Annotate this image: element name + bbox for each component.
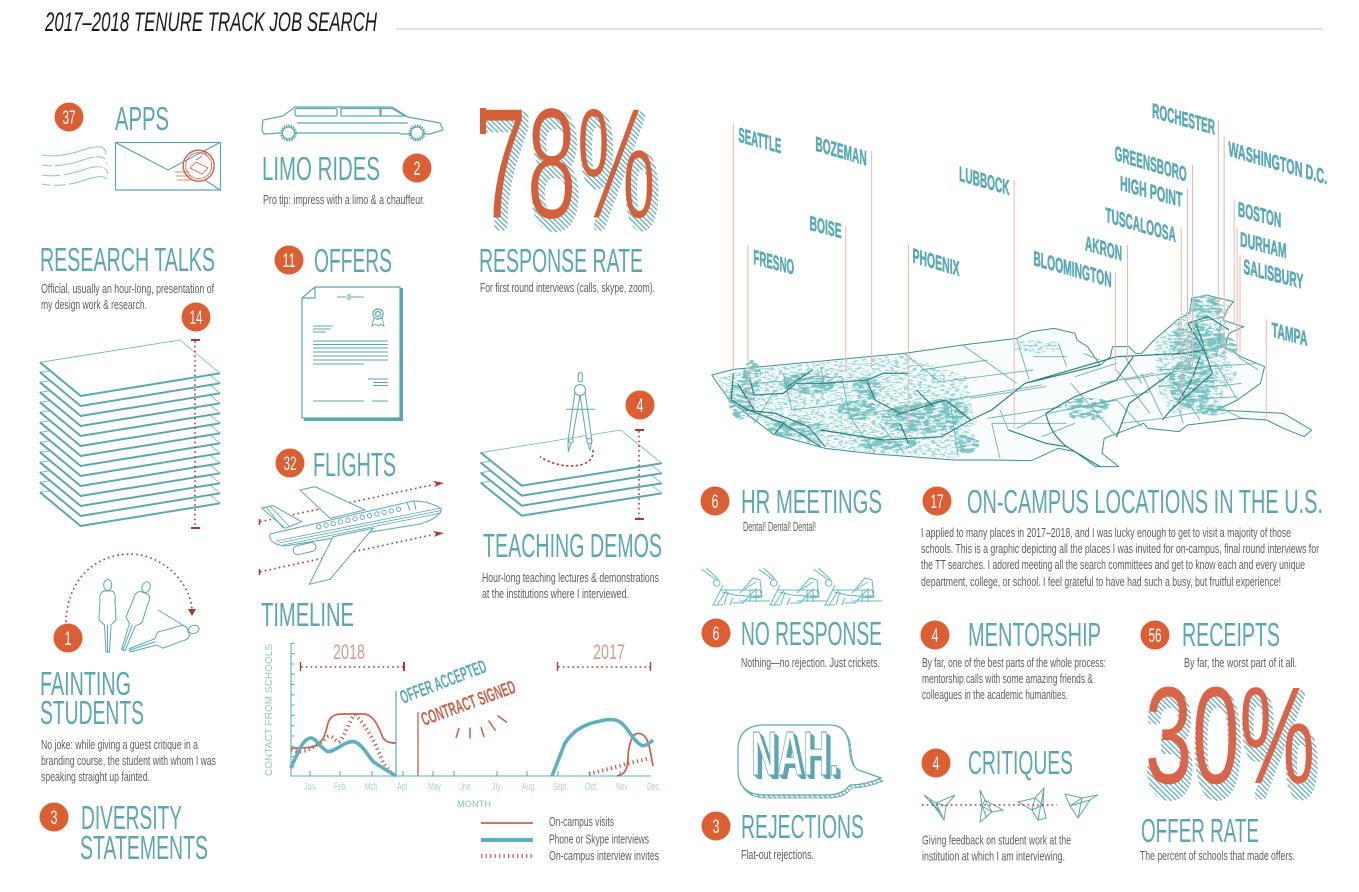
badge: 4: 4 [932, 754, 940, 775]
text: hr note: Dental! Dental! Dental! [743, 520, 816, 534]
month labels: Jly. [492, 781, 502, 793]
year range: 2017: 2017 [593, 641, 625, 664]
icon: limousine [262, 107, 443, 140]
heading: fainting students: STUDENTS [40, 694, 144, 731]
badge: 37: 37 [62, 108, 76, 129]
heading: offers: OFFERS [314, 242, 392, 279]
city labels: BOISE [810, 212, 842, 244]
legend: On-campus visits [549, 815, 614, 829]
heading: timeline: TIMELINE [261, 596, 354, 633]
month labels: Dec. [647, 781, 661, 793]
panel: critiques [922, 744, 1098, 864]
panel: fainting students [40, 554, 216, 784]
text: research talks note: Official, usually an hour-long, presentation of [41, 282, 214, 296]
terrain texture [728, 295, 1238, 453]
panel: on-campus locations text [921, 483, 1323, 589]
badge: 1: 1 [64, 629, 72, 650]
heading: teaching demos: TEACHING DEMOS [483, 527, 662, 564]
text: critiques note: Giving feedback on student work at the [922, 834, 1071, 848]
badge: 3 [702, 812, 730, 840]
month labels [304, 781, 661, 793]
text: mentorship note: By far, one of the best parts of the whole process: [922, 656, 1106, 670]
icon: stack of 14 papers [40, 340, 220, 526]
text: teaching demos note: Hour-long teaching lectures & demonstrations [482, 571, 659, 585]
title: 2017–2018 TENURE TRACK JOB SEARCH [44, 7, 377, 37]
heading: hr meetings: HR MEETINGS [741, 483, 882, 520]
text: critiques note: institution at which I am interviewing. [922, 850, 1065, 864]
badge: 6 [702, 618, 730, 648]
badge: 1 [54, 624, 82, 652]
city labels: TUSCALOOSA [1105, 204, 1176, 247]
month labels: Feb. [334, 781, 347, 793]
badge: 56 [1140, 620, 1170, 650]
city labels: FRESNO [753, 246, 794, 280]
badge: 3: 3 [712, 817, 720, 838]
month labels: Aug. [522, 781, 536, 793]
heading: fainting students: FAINTING [40, 665, 131, 702]
heading: critiques: CRITIQUES [968, 744, 1073, 781]
month labels: Oct. [585, 781, 598, 793]
series: on-campus interview invites [291, 715, 650, 775]
location pins [733, 120, 1266, 428]
text: fainting note: No joke: while giving a guest critique in a [41, 738, 198, 752]
legend: Phone or Skype interviews [549, 832, 649, 846]
city labels: SEATTLE [738, 124, 781, 159]
heading: offer rate: OFFER RATE [1141, 812, 1259, 849]
city labels: HIGH POINT [1120, 172, 1183, 212]
badge: 4 [626, 390, 654, 420]
month labels: Nov. [616, 781, 629, 793]
panel: timeline [261, 596, 661, 863]
legend: On-campus interview invites [549, 849, 659, 863]
badge: 3 [40, 802, 68, 832]
axis label: month: MONTH [457, 799, 491, 809]
panel: offer rate [1140, 659, 1318, 863]
us map outline [712, 295, 1312, 467]
text: locations paragraph [921, 526, 1319, 589]
panel: mentorship [920, 616, 1106, 702]
heading: mentorship: MENTORSHIP [968, 616, 1101, 653]
icon: envelope with stamp [116, 142, 220, 190]
text: fainting note [41, 738, 216, 784]
text: no response note: Nothing—no rejection. Just crickets. [741, 656, 880, 670]
heading: no response: NO RESPONSE [741, 615, 882, 652]
panel: offers [274, 242, 403, 421]
panel: diversity statements [40, 799, 208, 866]
heading: limo rides: LIMO RIDES [262, 150, 380, 187]
month labels: Sept. [553, 781, 568, 793]
series: phone or skype interviews [291, 720, 653, 776]
panel: no response [702, 568, 882, 670]
city labels: ROCHESTER [1152, 99, 1215, 140]
badge: 4: 4 [932, 626, 939, 647]
height marker [191, 340, 200, 528]
icon: fainting figures [99, 579, 202, 658]
icon: nah speech bubble: NAH. [751, 720, 839, 789]
callout: contract signed [418, 677, 519, 776]
big number: 78%: 78% [481, 81, 659, 260]
icon: crickets [702, 568, 882, 605]
text: response rate note: For first round interviews (calls, skype, zoom). [480, 281, 655, 295]
badge: 2: 2 [414, 159, 420, 180]
icon: offer letter [302, 287, 403, 421]
height marker [635, 430, 644, 519]
map: on-campus locations [712, 99, 1327, 467]
badge: 37 [54, 102, 84, 132]
heading: diversity statements [80, 799, 208, 866]
month labels: Jne. [460, 781, 472, 793]
text: receipts note: By far, the worst part of it all. [1184, 656, 1297, 670]
city labels: TAMPA [1272, 318, 1308, 351]
badge: 32 [276, 448, 304, 478]
icon: postmark waves [42, 147, 108, 185]
callout: offer accepted [396, 656, 490, 776]
icon: nah speech bubble: NAH. [755, 724, 843, 793]
city labels: AKRON [1085, 232, 1122, 266]
big number: 78% [477, 76, 659, 260]
badge: 32: 32 [284, 454, 296, 475]
text: mentorship note [922, 656, 1106, 702]
legend [481, 815, 659, 863]
heading: apps: APPS [115, 100, 169, 137]
heading: flights: FLIGHTS [313, 446, 396, 483]
badge: 17 [922, 486, 952, 516]
panel: rejections [702, 720, 883, 862]
badge: 6: 6 [712, 624, 720, 645]
badge: 11: 11 [282, 251, 296, 272]
text: rejections note: Flat-out rejections. [741, 848, 814, 862]
heading: rejections: REJECTIONS [741, 808, 864, 845]
text: fainting note: speaking straight up fainted. [41, 770, 150, 784]
heading: fainting students [40, 665, 144, 731]
panel: research talks [40, 241, 220, 528]
month labels: Apl. [397, 781, 409, 793]
major rivers and roads [731, 317, 1229, 467]
panel: teaching demos [481, 373, 662, 601]
year range: 2018: 2018 [333, 641, 365, 664]
icon: stack of 4 sheets [481, 430, 662, 516]
series: on-campus visits [291, 714, 653, 776]
state lines [754, 317, 1258, 458]
city labels: BOSTON [1238, 198, 1281, 233]
icon: origami birds [922, 788, 1098, 822]
city labels: BOZEMAN [815, 133, 867, 171]
badge: 17: 17 [930, 492, 944, 513]
badge: 14 [182, 302, 210, 332]
panel: receipts [1140, 616, 1297, 670]
arrows: flight paths [260, 481, 444, 575]
year range: 2017 [558, 641, 650, 671]
text: offer rate note: The percent of schools that made offers. [1140, 849, 1295, 863]
badge: 2 [402, 154, 432, 182]
text: fainting note: branding course, the student with whom I was [41, 754, 216, 768]
badge: 4: 4 [636, 396, 644, 417]
month labels: Mch. [365, 781, 379, 793]
city labels: BLOOMINGTON [1033, 247, 1112, 292]
panel: apps [42, 100, 220, 190]
heading: diversity statements: STATEMENTS [80, 829, 208, 866]
callout: contract signed: CONTRACT SIGNED [419, 677, 519, 731]
text: critiques note [922, 834, 1071, 864]
panel: flights [260, 446, 444, 584]
text: teaching demos note [482, 571, 659, 601]
heading: research talks: RESEARCH TALKS [40, 241, 215, 278]
arrow: fall arc [66, 554, 196, 622]
month labels: May [428, 781, 441, 793]
text: mentorship note: colleagues in the academic humanities. [922, 688, 1068, 702]
badge: 4 [920, 620, 950, 650]
heading: diversity statements: DIVERSITY [81, 799, 182, 836]
panel: response rate [477, 76, 659, 295]
axis label: contact: CONTACT FROM SCHOOLS [264, 644, 275, 776]
text: research talks note [41, 282, 214, 312]
badge: 4 [922, 748, 950, 778]
badge: 14: 14 [190, 308, 203, 329]
badge: 56: 56 [1148, 626, 1162, 647]
badge: 11 [274, 246, 304, 274]
light terrain texture [717, 303, 1238, 458]
panel: limo rides [262, 107, 443, 207]
icon: nah speech bubble: NAH. [754, 723, 842, 792]
city labels: GREENSBORO [1115, 142, 1187, 187]
badge: 3: 3 [50, 808, 58, 829]
big number: 78%: 78% [477, 76, 656, 252]
badge: 6 [700, 486, 730, 516]
panel: hr meetings [700, 483, 882, 534]
chart axes [291, 643, 651, 776]
heading: receipts: RECEIPTS [1182, 616, 1280, 653]
callout: offer accepted: OFFER ACCEPTED [397, 656, 490, 709]
badge: 6: 6 [712, 492, 718, 513]
month labels: Jan. [304, 781, 317, 793]
text: research talks note: my design work & research. [41, 298, 147, 312]
icon: airplane [262, 487, 442, 584]
icon: compass [540, 373, 595, 466]
heading: response rate: RESPONSE RATE [479, 242, 643, 279]
city labels: LUBBOCK [959, 163, 1010, 200]
text: limo note: Pro tip: impress with a limo & a chauffeur. [263, 193, 425, 207]
icon: nah speech bubble: NAH. [753, 722, 841, 791]
year range: 2018 [300, 641, 404, 671]
text: mentorship note: mentorship calls with some amazing friends & [922, 672, 1093, 686]
city labels: DURHAM [1240, 228, 1287, 264]
text: teaching demos note: at the institutions where I interviewed. [482, 587, 629, 601]
city labels [738, 99, 1327, 351]
city labels: PHOENIX [913, 244, 960, 281]
